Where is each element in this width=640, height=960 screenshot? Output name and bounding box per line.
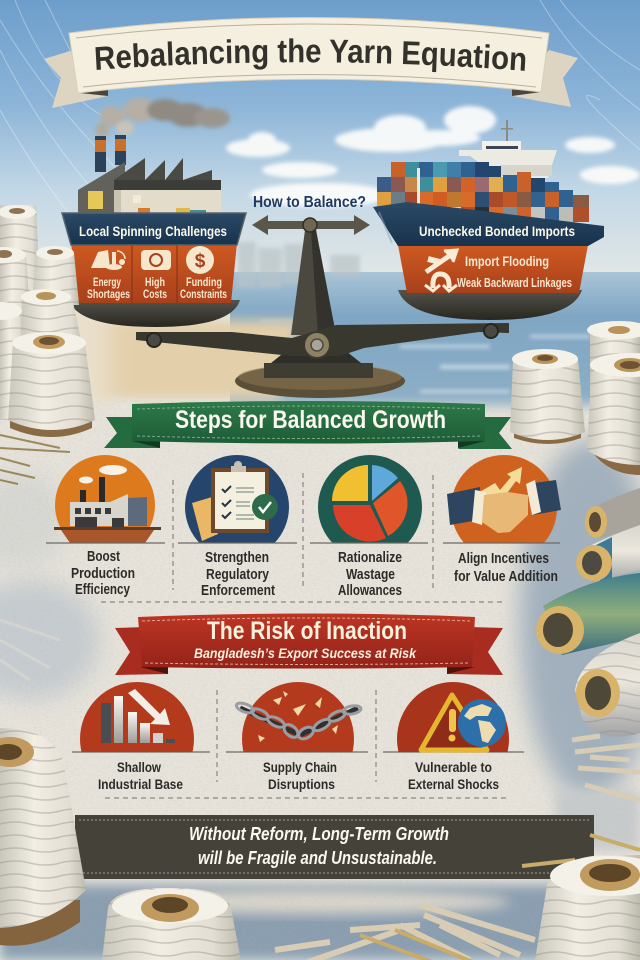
label: funding constraints: Constraints xyxy=(180,287,227,301)
scattered fibre sticks xyxy=(0,435,640,960)
label: high costs: High xyxy=(145,275,165,289)
balance scale stand xyxy=(136,215,509,398)
post xyxy=(291,230,336,335)
ribbon tails xyxy=(104,417,160,448)
ribbon xyxy=(132,401,485,444)
icon: pie chart xyxy=(318,455,422,542)
label: Allowances xyxy=(338,582,402,599)
title text: Rebalancing the Yarn Equation xyxy=(95,38,526,72)
left scale pan: local spinning challenges xyxy=(62,213,246,327)
big yarn cone bottom left xyxy=(0,728,86,946)
label: energy shortages: Shortages xyxy=(87,287,130,301)
icon: dollar coin: $ xyxy=(195,251,206,272)
label xyxy=(454,550,558,585)
navy ship hull band xyxy=(373,202,604,246)
label: Rationalize xyxy=(338,549,402,566)
risk 1: shallow industrial base xyxy=(80,682,194,796)
risk 3: vulnerable to external shocks xyxy=(397,682,509,796)
title banner xyxy=(44,17,578,108)
yarn cones right cluster xyxy=(510,321,640,475)
yarn cone bottom right xyxy=(535,855,640,960)
label: high costs xyxy=(143,275,167,301)
label xyxy=(201,549,275,599)
pan dish xyxy=(398,290,582,320)
heading: The Risk of Inaction xyxy=(207,617,407,645)
label: high costs: Costs xyxy=(143,287,167,301)
smoke xyxy=(95,98,230,137)
label: Efficiency xyxy=(75,581,131,598)
clouds xyxy=(226,106,640,207)
step 3: rationalize wastage allowances xyxy=(318,455,422,599)
label: import flooding: Import Flooding xyxy=(465,253,549,269)
heading: Steps for Balanced Growth xyxy=(175,406,446,434)
beam xyxy=(136,323,509,356)
navy rim xyxy=(62,213,246,245)
subheading: Bangladesh’s Export Success at Risk xyxy=(194,645,417,661)
label: Vulnerable to xyxy=(415,759,492,775)
ribbon xyxy=(138,614,475,668)
rust hull xyxy=(398,245,588,293)
icon: factory xyxy=(54,455,161,542)
banner ribbon xyxy=(69,18,549,93)
label: for Value Addition xyxy=(454,568,558,585)
yarn cones left cluster xyxy=(0,205,95,437)
label: Regulatory xyxy=(206,566,270,583)
label xyxy=(263,759,337,792)
label: Boost xyxy=(87,548,120,565)
closing message band xyxy=(75,815,594,879)
icon: import arrows xyxy=(425,250,457,291)
icon: falling bars xyxy=(80,682,194,752)
label: Align Incentives xyxy=(458,550,549,567)
risk 2: supply chain disruptions xyxy=(235,682,362,796)
pan dish xyxy=(69,300,240,327)
closing line 2: will be Fragile and Unsustainable. xyxy=(198,848,437,868)
chimneys xyxy=(95,135,126,172)
label: Production xyxy=(71,565,135,582)
closing line 1: Without Reform, Long-Term Growth xyxy=(189,824,449,844)
label: energy shortages: Energy xyxy=(93,275,121,289)
container stacks xyxy=(377,162,589,222)
label: Supply Chain xyxy=(263,759,337,775)
step 1: boost production efficiency xyxy=(54,455,161,598)
icon: broken chain xyxy=(234,682,362,752)
label: Wastage xyxy=(346,566,395,583)
thread spools lying on right side xyxy=(536,488,640,737)
label: energy shortages xyxy=(87,275,130,301)
ship superstructure xyxy=(459,120,557,178)
heading: Unchecked Bonded Imports xyxy=(419,223,575,239)
ribbon tails xyxy=(115,627,168,675)
label: External Shocks xyxy=(408,776,499,792)
label: funding constraints: Funding xyxy=(186,275,222,289)
banner right tail xyxy=(512,50,578,107)
icon: warning and globe xyxy=(397,682,509,752)
label: Industrial Base xyxy=(98,776,183,792)
label xyxy=(98,759,183,792)
label: funding constraints xyxy=(180,275,227,301)
right scale pan: unchecked bonded imports xyxy=(373,202,604,320)
icon: clipboard xyxy=(185,455,289,542)
step 2: strengthen regulatory enforcement xyxy=(185,455,289,599)
label xyxy=(408,759,499,792)
base xyxy=(235,364,405,398)
icon: high costs xyxy=(141,250,171,270)
factory on left pan xyxy=(78,135,221,220)
arrow: double headed balance xyxy=(252,215,370,235)
label xyxy=(338,549,402,599)
label: Disruptions xyxy=(268,776,335,792)
heading: how to balance: How to Balance? xyxy=(253,194,366,211)
label: weak backward linkages: Weak Backward Linkages xyxy=(457,275,572,290)
yarn cone bottom centre xyxy=(102,888,241,960)
rust body xyxy=(71,243,237,303)
label: Shallow xyxy=(117,759,161,775)
faint city skyline xyxy=(238,242,360,288)
label xyxy=(71,548,135,598)
icon: dollar coin xyxy=(186,246,214,274)
banner left tail xyxy=(44,51,108,108)
risk banner xyxy=(115,614,503,675)
step 4: align incentives for value addition xyxy=(447,455,561,585)
steps banner xyxy=(104,401,512,449)
label: Enforcement xyxy=(201,582,275,599)
icon: energy xyxy=(91,250,125,270)
heading: Local Spinning Challenges xyxy=(79,223,227,239)
label: Strengthen xyxy=(205,549,269,566)
icon: handshake with rising arrow xyxy=(447,455,561,542)
